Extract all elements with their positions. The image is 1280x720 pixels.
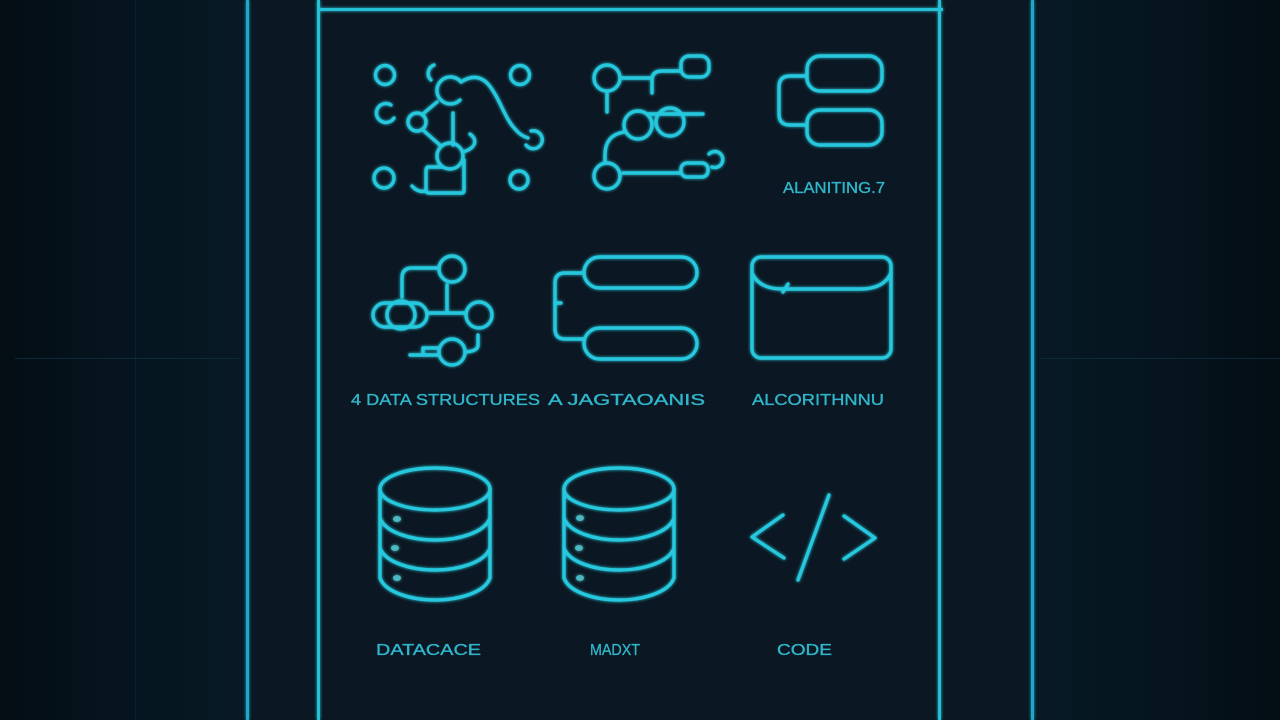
label: code: CODE <box>777 642 832 659</box>
label: database: DATACACE <box>376 642 481 659</box>
label: middle: A JAGTAOANIS <box>548 392 705 409</box>
icon: database left <box>380 468 490 600</box>
icon: folder box <box>752 257 891 358</box>
icon: graph nodes <box>373 256 492 365</box>
icon: network graph <box>374 65 542 193</box>
icon: database right <box>564 468 674 600</box>
icon: bracket boxes <box>555 257 697 359</box>
icon: linked boxes <box>779 56 882 145</box>
icon: tree nodes <box>594 56 723 189</box>
icon: code brackets <box>752 495 875 580</box>
label: data structures: 4 DATA STRUCTURES <box>351 392 540 409</box>
panel frame <box>248 0 1032 720</box>
label: top right: ALANITING.7 <box>783 180 885 197</box>
label: madxt: MADXT <box>590 642 640 659</box>
label: algorithm: ALCORITHNNU <box>752 392 884 409</box>
